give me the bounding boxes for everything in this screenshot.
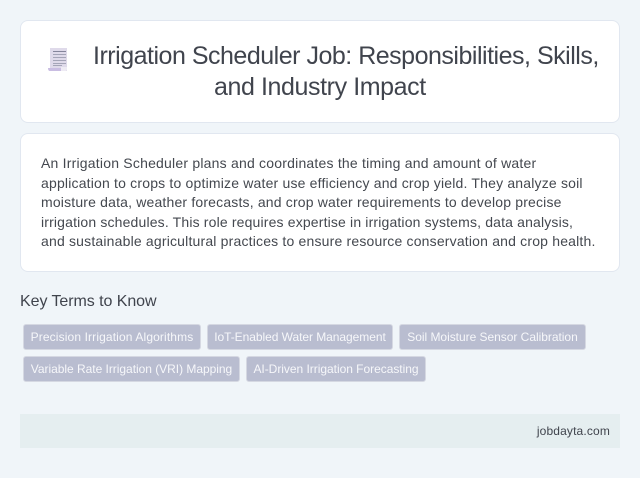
title: and Industry Impact: [214, 73, 426, 101]
description text: [41, 155, 596, 249]
tag: Soil Moisture Sensor Calibration: [407, 330, 578, 344]
tag: [207, 324, 393, 350]
description text: and sustainable agricultural practices to ensure resource conservation and crop health.: [41, 233, 596, 249]
heading: key terms: Key Terms to Know: [20, 293, 157, 310]
title: [93, 42, 599, 101]
description text: moisture data, weather forecasts, and crop water requirements to develop precise: [41, 194, 562, 210]
footer bar: [20, 414, 620, 448]
tag: [23, 324, 201, 350]
tag: [23, 356, 240, 382]
tag list: [23, 324, 586, 382]
tag: [399, 324, 586, 350]
tag: Variable Rate Irrigation (VRI) Mapping: [31, 362, 232, 376]
tag: Precision Irrigation Algorithms: [31, 330, 193, 344]
panel: description card: [20, 133, 620, 272]
icon: document scroll: [48, 48, 67, 71]
description text: application to crops to optimize water use efficiency and crop yield. They analyze soil: [41, 175, 583, 191]
description text: irrigation schedules. This role requires expertise in irrigation systems, data analysis,: [41, 214, 573, 230]
tag: AI-Driven Irrigation Forecasting: [253, 362, 419, 376]
tag: IoT-Enabled Water Management: [214, 330, 386, 344]
panel: title card: [20, 20, 620, 123]
footer source text: jobdayta.com: [537, 424, 610, 438]
description text: An Irrigation Scheduler plans and coordinates the timing and amount of water: [41, 155, 536, 171]
title: Irrigation Scheduler Job: Responsibilities, Skills,: [93, 42, 599, 70]
tag: [246, 356, 426, 382]
